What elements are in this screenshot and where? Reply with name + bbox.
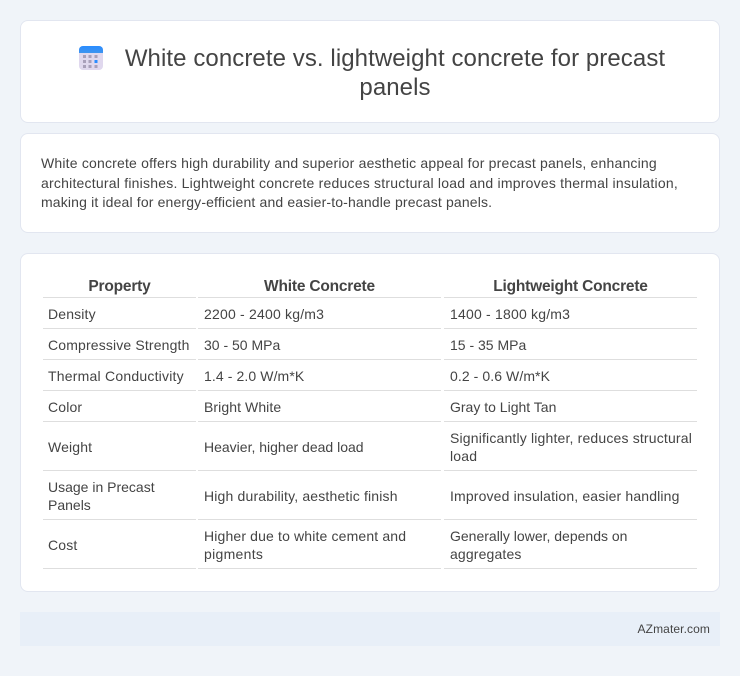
title: White concrete vs. lightweight concrete for precast panels — [125, 45, 665, 101]
row: thermal conductivity — [48, 368, 550, 384]
row: compressive strength: 30 - 50 MPa — [204, 337, 280, 353]
row: usage in precast panels — [48, 479, 680, 513]
row: thermal conductivity: 0.2 - 0.6 W/m*K — [450, 368, 550, 384]
row: color — [48, 399, 556, 415]
row: compressive strength — [48, 337, 526, 353]
table header: Lightweight Concrete — [493, 278, 648, 295]
panel: title card — [20, 20, 720, 123]
table header: White Concrete — [264, 278, 375, 295]
panel: comparison table — [20, 253, 720, 592]
row: weight: Significantly lighter, reduces structural — [450, 430, 692, 446]
row: compressive strength: Compressive Strength — [48, 337, 190, 353]
row: thermal conductivity: Thermal Conductivity — [48, 368, 184, 384]
row: color: Bright White — [204, 399, 281, 415]
footer credit: AZmater.com — [638, 622, 710, 636]
row: color: Gray to Light Tan — [450, 399, 556, 415]
row: usage in precast panels: Improved insulation, easier handling — [450, 488, 680, 504]
description text: architectural finishes. Lightweight concrete reduces structural load and improves thermal insulation, — [41, 174, 678, 190]
row: cost — [48, 528, 627, 562]
icon: calendar — [79, 46, 103, 70]
row: compressive strength: 15 - 35 MPa — [450, 337, 526, 353]
table header: Property — [88, 278, 151, 295]
row: cost: aggregates — [450, 546, 522, 562]
row: usage in precast panels: Panels — [48, 497, 91, 513]
row: density: 2200 - 2400 kg/m3 — [204, 306, 324, 322]
panel: description — [20, 133, 720, 233]
row: color: Color — [48, 399, 82, 415]
row: density: Density — [48, 306, 96, 322]
row: cost: Higher due to white cement and — [204, 528, 406, 544]
description text — [41, 155, 678, 210]
footer bar — [20, 612, 720, 646]
row: weight — [48, 430, 692, 464]
row: weight: Weight — [48, 439, 92, 455]
row: thermal conductivity: 1.4 - 2.0 W/m*K — [204, 368, 304, 384]
row: weight: Heavier, higher dead load — [204, 439, 364, 455]
row: cost: pigments — [204, 546, 263, 562]
row: density — [48, 306, 570, 322]
row: cost: Cost — [48, 537, 77, 553]
row: density: 1400 - 1800 kg/m3 — [450, 306, 570, 322]
row: weight: load — [450, 448, 477, 464]
row: usage in precast panels: High durability, aesthetic finish — [204, 488, 398, 504]
row: usage in precast panels: Usage in Precast — [48, 479, 155, 495]
description text: making it ideal for energy-efficient and easier-to-handle precast panels. — [41, 194, 492, 210]
table header — [88, 278, 648, 295]
description text: White concrete offers high durability and superior aesthetic appeal for precast panels, enhancing — [41, 155, 657, 171]
row: cost: Generally lower, depends on — [450, 528, 627, 544]
